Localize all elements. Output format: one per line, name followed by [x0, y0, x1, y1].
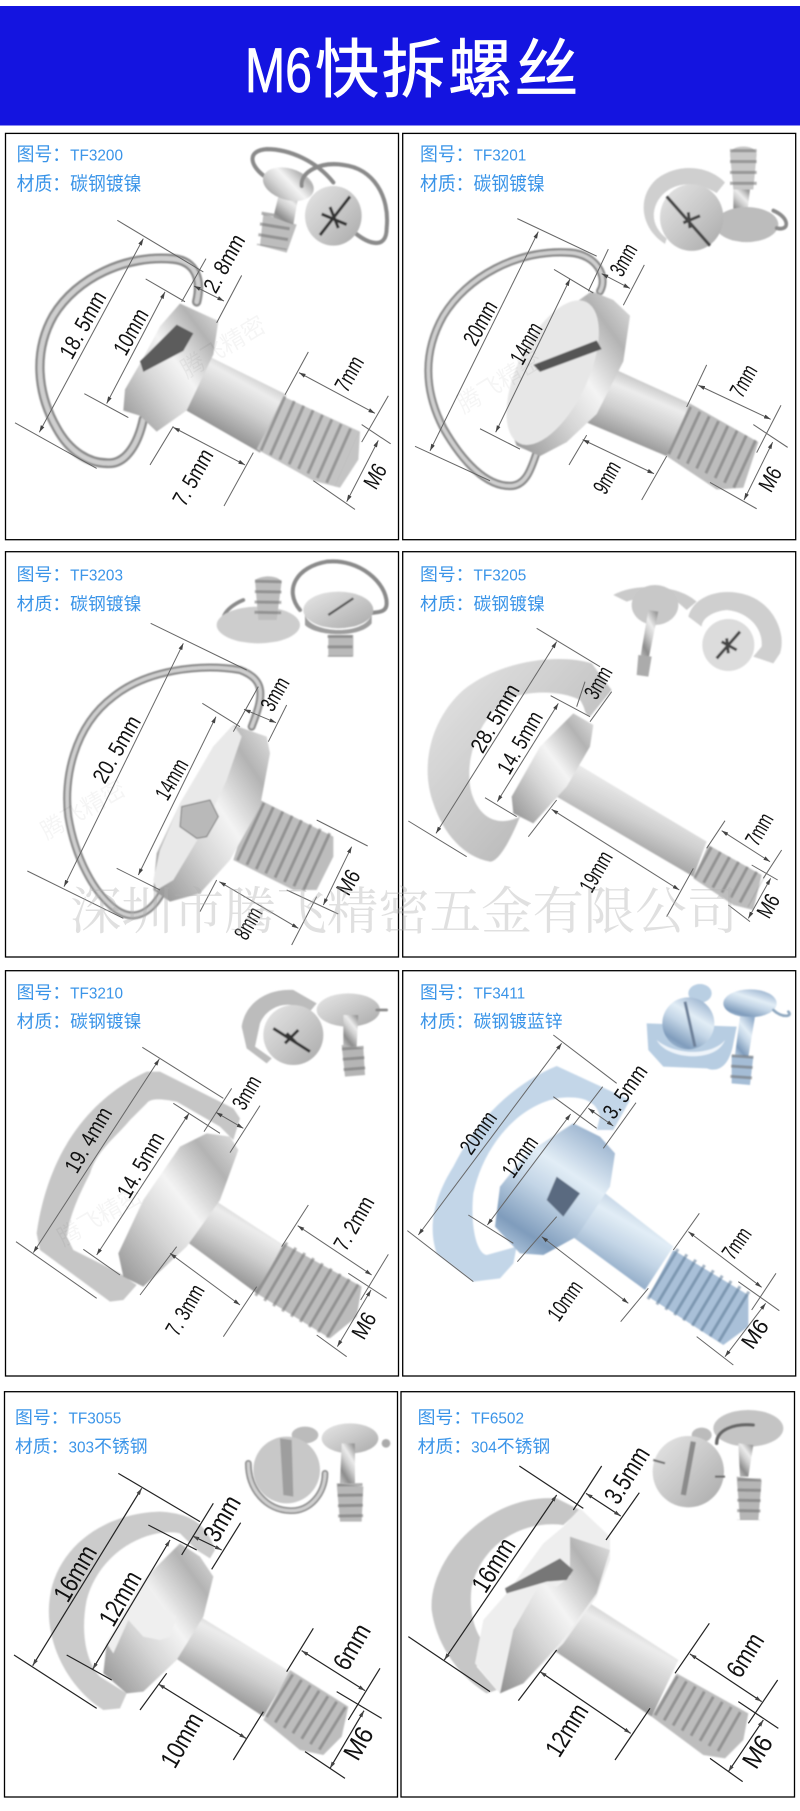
dimension labels: 7. 2mm — [329, 1192, 379, 1255]
material: 材质：303不锈钢 — [15, 1437, 148, 1457]
dimension labels: 3. 5mm — [598, 1060, 652, 1123]
dimension labels: 7mm — [329, 351, 369, 396]
photo: small screws — [613, 585, 782, 677]
dimension lines — [408, 628, 782, 922]
dimension labels: 6mm — [327, 1618, 377, 1675]
dimension labels: M6 — [358, 459, 392, 493]
photo: small screws — [647, 984, 790, 1085]
material: 材质：碳钢镀镍 — [420, 173, 545, 194]
photo: main screw — [37, 1072, 362, 1338]
watermark: 腾飞精密 — [50, 1177, 148, 1253]
dimension labels: 20. 5mm — [88, 711, 146, 787]
part number: 图号：TF3201 — [420, 143, 526, 165]
part number: 图号：TF3205 — [420, 565, 526, 585]
dimension lines — [15, 220, 391, 509]
dimension lines — [415, 219, 788, 509]
photo: small screws — [248, 1423, 390, 1522]
dimension labels: 20mm — [458, 296, 502, 350]
dimension labels: 9mm — [588, 456, 626, 498]
panel: TF6502 — [401, 1392, 794, 1797]
dimension labels: 14. 5mm — [112, 1128, 169, 1202]
dimension labels: 19. 4mm — [60, 1103, 117, 1177]
panel: TF3205 — [403, 552, 796, 957]
dimension labels: M6 — [337, 1721, 380, 1765]
photo: small screws — [653, 1410, 783, 1520]
dimension labels: 2. 8mm — [198, 229, 250, 297]
dimension labels: 12mm — [92, 1566, 148, 1631]
dimension labels: 16mm — [465, 1532, 522, 1598]
photo: small screws — [217, 561, 387, 657]
dimension labels: 6mm — [720, 1627, 770, 1683]
dimension lines — [407, 1035, 779, 1365]
dimension lines — [27, 623, 368, 945]
dimension labels: 7mm — [740, 809, 778, 850]
dimension labels: M6 — [736, 1730, 779, 1774]
part number: 图号：TF3055 — [15, 1407, 121, 1427]
panel: TF3201 — [403, 133, 796, 540]
dimension labels: 16mm — [47, 1540, 103, 1607]
panel: TF3200 — [6, 133, 398, 540]
dimension labels: 10mm — [542, 1276, 588, 1326]
dimension labels: 3mm — [255, 673, 295, 715]
material: 材质：304不锈钢 — [418, 1437, 550, 1457]
dimension lines — [14, 1473, 382, 1778]
photo: small screws — [242, 990, 387, 1077]
dimension labels: 7. 3mm — [160, 1280, 210, 1340]
watermark: 腾飞精密 — [450, 340, 548, 420]
dimension labels: 14. 5mm — [492, 707, 548, 779]
panel: TF3411 — [403, 971, 796, 1376]
material: 材质：碳钢镀镍 — [17, 594, 141, 614]
dimension labels: 3mm — [197, 1490, 247, 1547]
dimension labels — [465, 662, 785, 922]
header banner — [0, 6, 800, 126]
photo: small screws — [252, 149, 387, 253]
dimension labels — [60, 1071, 381, 1343]
dimension labels: 18. 5mm — [54, 286, 111, 363]
photo: small screws — [644, 146, 786, 251]
panel: TF3210 — [6, 971, 398, 1376]
dimension labels: 7mm — [724, 360, 762, 402]
dimension labels: M6 — [753, 462, 787, 496]
dimension labels — [88, 673, 365, 944]
dimension labels: 19mm — [574, 847, 618, 897]
dimension labels: 3mm — [227, 1071, 266, 1114]
part number: 图号：TF3203 — [17, 565, 123, 585]
dimension labels — [465, 1441, 779, 1774]
dimension labels: 10mm — [154, 1707, 209, 1773]
material: 材质：碳钢镀镍 — [420, 594, 545, 614]
dimension labels: 12mm — [539, 1698, 594, 1762]
watermark: 腾飞精密 — [173, 305, 271, 385]
dimension labels — [455, 1060, 774, 1353]
dimension labels: 3mm — [579, 662, 617, 703]
dimension labels: 12mm — [497, 1131, 543, 1182]
photo: main screw — [428, 659, 762, 910]
dimension labels: 10mm — [108, 304, 153, 360]
part number: 图号：TF6502 — [418, 1407, 524, 1427]
panel: TF3203 — [6, 552, 398, 957]
dimension labels: 7. 5mm — [167, 444, 218, 510]
dimension lines — [16, 1047, 388, 1357]
dimension labels: 28. 5mm — [465, 680, 525, 757]
dimension lines — [408, 1466, 778, 1782]
part number: 图号：TF3210 — [17, 982, 123, 1002]
panel: TF3055 — [4, 1392, 398, 1797]
dimension labels: M6 — [736, 1315, 774, 1353]
photo: main screw — [49, 1512, 348, 1755]
dimension labels — [458, 239, 787, 498]
dimension labels: M6 — [347, 1308, 381, 1343]
dimension labels: 3mm — [604, 239, 642, 281]
material: 材质：碳钢镀蓝锌 — [420, 1012, 563, 1032]
dimension labels: M6 — [331, 865, 365, 899]
company watermark: 深圳市腾飞精密五金有限公司 — [70, 870, 738, 944]
dimension labels: 14mm — [505, 318, 547, 369]
part number: 图号：TF3200 — [17, 143, 123, 165]
material: 材质：碳钢镀镍 — [17, 1012, 141, 1032]
photo: main screw — [67, 668, 333, 915]
dimension labels — [47, 1490, 380, 1773]
dimension labels — [54, 229, 392, 510]
dimension labels: 7mm — [717, 1223, 756, 1264]
dimension labels: 8mm — [229, 903, 267, 944]
title: 快拆螺丝 — [315, 34, 581, 106]
dimension labels: 20mm — [455, 1106, 502, 1159]
photo: main screw — [40, 258, 360, 488]
dimension labels: 14mm — [150, 754, 193, 804]
dimension labels: 3.5mm — [598, 1441, 656, 1509]
material: 材质：碳钢镀镍 — [17, 173, 141, 194]
part number: 图号：TF3411 — [420, 982, 525, 1002]
photo: main screw — [428, 252, 758, 489]
photo: main screw — [432, 1498, 748, 1758]
photo: main screw — [433, 1066, 748, 1345]
dimension labels: M6 — [752, 890, 785, 922]
watermark: 腾飞精密 — [33, 770, 131, 846]
title: M6 — [245, 36, 312, 106]
